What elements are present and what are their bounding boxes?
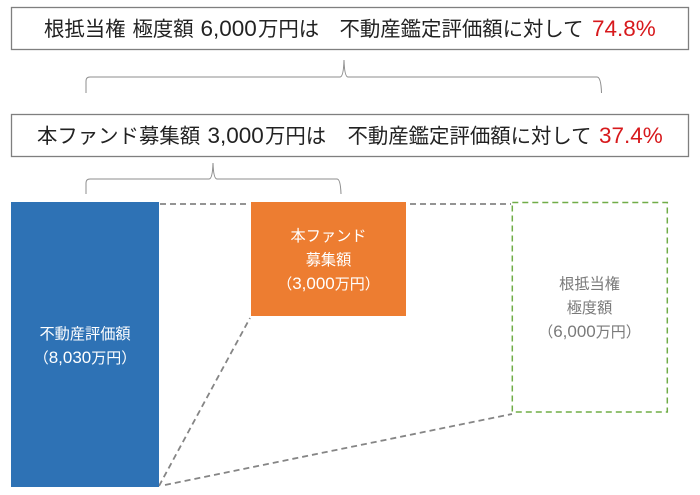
panel: fund raise box: （3,000万円） <box>277 274 380 293</box>
panel: collateral limit statement <box>12 8 688 50</box>
panel: fund raise statement: 3,000 <box>208 123 264 148</box>
panel: fund raise statement <box>12 114 688 156</box>
panel: collateral limit statement: 万円は <box>258 19 319 41</box>
panel: collateral limit statement: 根抵当権 <box>44 18 126 41</box>
panel: collateral limit statement: 不動産鑑定評価額に対して <box>340 18 584 41</box>
brace: fund raise span <box>86 163 341 194</box>
panel: fund raise box: 本ファンド <box>291 228 366 245</box>
panel: collateral limit statement: 6,000 <box>200 16 257 41</box>
panel: collateral limit dashed box: 根抵当権 <box>559 276 620 293</box>
dashed connector lines <box>159 204 512 486</box>
panel: collateral limit statement: 74.8% <box>592 16 656 41</box>
panel: fund raise box: 募集額 <box>306 252 351 269</box>
panel: fund raise statement: 本ファンド募集額 <box>37 125 200 148</box>
panel: collateral limit dashed box <box>512 202 667 412</box>
panel: fund raise statement: 不動産鑑定評価額に対して <box>348 125 592 148</box>
panel: real estate appraisal bar <box>11 202 159 487</box>
panel: real estate appraisal bar: （8,030万円） <box>34 348 136 367</box>
panel: collateral limit statement: 極度額 <box>132 18 194 41</box>
panel: fund raise statement: 万円は <box>265 126 326 148</box>
brace: collateral limit span <box>86 60 602 93</box>
panel: real estate appraisal bar: 不動産評価額 <box>39 326 131 343</box>
panel: fund raise box <box>251 202 406 316</box>
panel: fund raise statement: 37.4% <box>599 123 663 148</box>
panel: collateral limit dashed box: 極度額 <box>567 300 612 317</box>
panel: collateral limit dashed box: （6,000万円） <box>538 322 641 341</box>
